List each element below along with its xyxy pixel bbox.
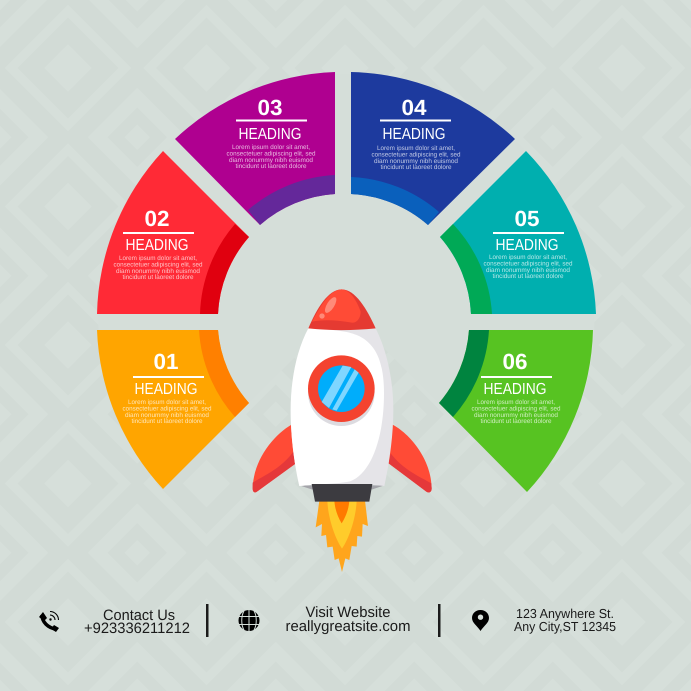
rule 01 bbox=[133, 376, 204, 378]
divider two bbox=[438, 604, 440, 637]
body text 01: Lorem ipsum dolor sit amet, bbox=[128, 399, 206, 406]
contact block bbox=[39, 607, 190, 637]
heading 03: HEADING bbox=[238, 126, 302, 143]
body text 06: consectetuer adipiscing elit, sed bbox=[472, 406, 561, 412]
sector 03 shape bbox=[175, 72, 335, 225]
number 06: 06 bbox=[502, 349, 528, 374]
body text 03: consectetuer adipiscing elit, sed bbox=[226, 150, 316, 158]
address block bbox=[472, 606, 616, 634]
panel 02 bbox=[97, 151, 249, 314]
body text 05: tincidunt ut laoreet dolore bbox=[492, 273, 564, 280]
contact text: +923336211212 bbox=[84, 620, 190, 637]
body text 06: Lorem ipsum dolor sit amet, bbox=[477, 399, 555, 406]
website text: Visit Website bbox=[306, 604, 390, 621]
heading 06: HEADING bbox=[484, 381, 546, 398]
address text: Any City,ST 12345 bbox=[514, 619, 616, 634]
nozzle skirt bbox=[299, 485, 384, 489]
address text bbox=[514, 606, 616, 634]
number 03: 03 bbox=[258, 95, 282, 120]
rule 02 bbox=[123, 232, 194, 234]
body text 04: consectetuer adipiscing elit, sed bbox=[372, 152, 461, 158]
sector 01 shape bbox=[97, 330, 249, 489]
rule 05 bbox=[493, 232, 564, 234]
body text 03: diam nonummy nibh euismod bbox=[229, 157, 313, 164]
heading 02: HEADING bbox=[126, 237, 188, 254]
body text 01 bbox=[122, 399, 212, 425]
sector 06 shape bbox=[439, 330, 593, 492]
address text: 123 Anywhere St. bbox=[516, 606, 614, 621]
body text 06: diam nonummy nibh euismod bbox=[474, 412, 558, 419]
body text 02: Lorem ipsum dolor sit amet, bbox=[119, 255, 197, 262]
body text 01: consectetuer adipiscing elit, sed bbox=[122, 406, 212, 412]
right fin bbox=[389, 424, 432, 492]
website text bbox=[286, 604, 410, 635]
website text: reallygreatsite.com bbox=[286, 618, 410, 635]
sector 05 shape bbox=[440, 151, 596, 314]
body text 05: consectetuer adipiscing elit, sed bbox=[484, 260, 573, 268]
left fin bbox=[253, 424, 295, 492]
panel 04 bbox=[351, 72, 515, 225]
panel 05 bbox=[440, 151, 596, 314]
panel 01 bbox=[97, 330, 249, 489]
body text 03: Lorem ipsum dolor sit amet, bbox=[232, 144, 310, 151]
rule 06 bbox=[481, 376, 552, 378]
body text 02: diam nonummy nibh euismod bbox=[116, 268, 200, 275]
sector 06 inner band bbox=[439, 330, 489, 417]
nose cone bbox=[308, 289, 376, 330]
body text 04: tincidunt ut laoreet dolore bbox=[380, 164, 452, 171]
body text 01: tincidunt ut laoreet dolore bbox=[132, 418, 203, 425]
body text 05: diam nonummy nibh euismod bbox=[486, 267, 570, 274]
website block bbox=[238, 604, 410, 635]
icon: globe bbox=[238, 610, 260, 631]
rule 03 bbox=[236, 120, 307, 122]
body text 04: diam nonummy nibh euismod bbox=[374, 158, 458, 165]
nozzle bbox=[312, 484, 372, 502]
contact text: Contact Us bbox=[103, 607, 175, 624]
panel 06 bbox=[439, 330, 593, 492]
body text 01: diam nonummy nibh euismod bbox=[125, 412, 209, 419]
flat disc behind the ring bbox=[98, 74, 594, 492]
body text 05 bbox=[484, 254, 573, 280]
sector 02 inner band bbox=[200, 224, 249, 314]
body text 02: consectetuer adipiscing elit, sed bbox=[114, 262, 203, 268]
panel 03 bbox=[175, 72, 335, 225]
sector 01 inner band bbox=[199, 330, 249, 417]
body text 03: tincidunt ut laoreet dolore bbox=[236, 163, 307, 170]
number 01: 01 bbox=[154, 349, 178, 374]
body text 05: Lorem ipsum dolor sit amet, bbox=[489, 254, 567, 261]
body text 02 bbox=[114, 255, 203, 281]
heading 05: HEADING bbox=[496, 237, 558, 254]
body text 06 bbox=[472, 399, 561, 425]
rule 04 bbox=[380, 120, 451, 122]
flame bbox=[316, 501, 368, 572]
contact text bbox=[84, 607, 190, 637]
body text 03 bbox=[226, 144, 316, 170]
number 04: 04 bbox=[402, 95, 427, 120]
icon: location pin bbox=[472, 610, 489, 631]
number 05: 05 bbox=[514, 206, 540, 231]
rocket illustration bbox=[253, 289, 432, 572]
sector 05 inner band bbox=[440, 224, 492, 314]
sector 03 inner band bbox=[248, 175, 335, 225]
heading 04: HEADING bbox=[382, 126, 446, 143]
sector 02 shape bbox=[97, 151, 249, 314]
porthole bbox=[308, 355, 375, 426]
body text 04: Lorem ipsum dolor sit amet, bbox=[377, 145, 455, 152]
divider one bbox=[206, 604, 208, 637]
sector 04 inner band bbox=[351, 177, 439, 225]
body text 04 bbox=[372, 145, 461, 171]
body text 06: tincidunt ut laoreet dolore bbox=[480, 418, 552, 425]
heading 01: HEADING bbox=[134, 381, 198, 398]
sector 04 shape bbox=[351, 72, 515, 225]
rocket body bbox=[291, 328, 393, 486]
body text 02: tincidunt ut laoreet dolore bbox=[122, 274, 194, 281]
icon: phone bbox=[39, 612, 59, 632]
number 02: 02 bbox=[144, 206, 170, 231]
